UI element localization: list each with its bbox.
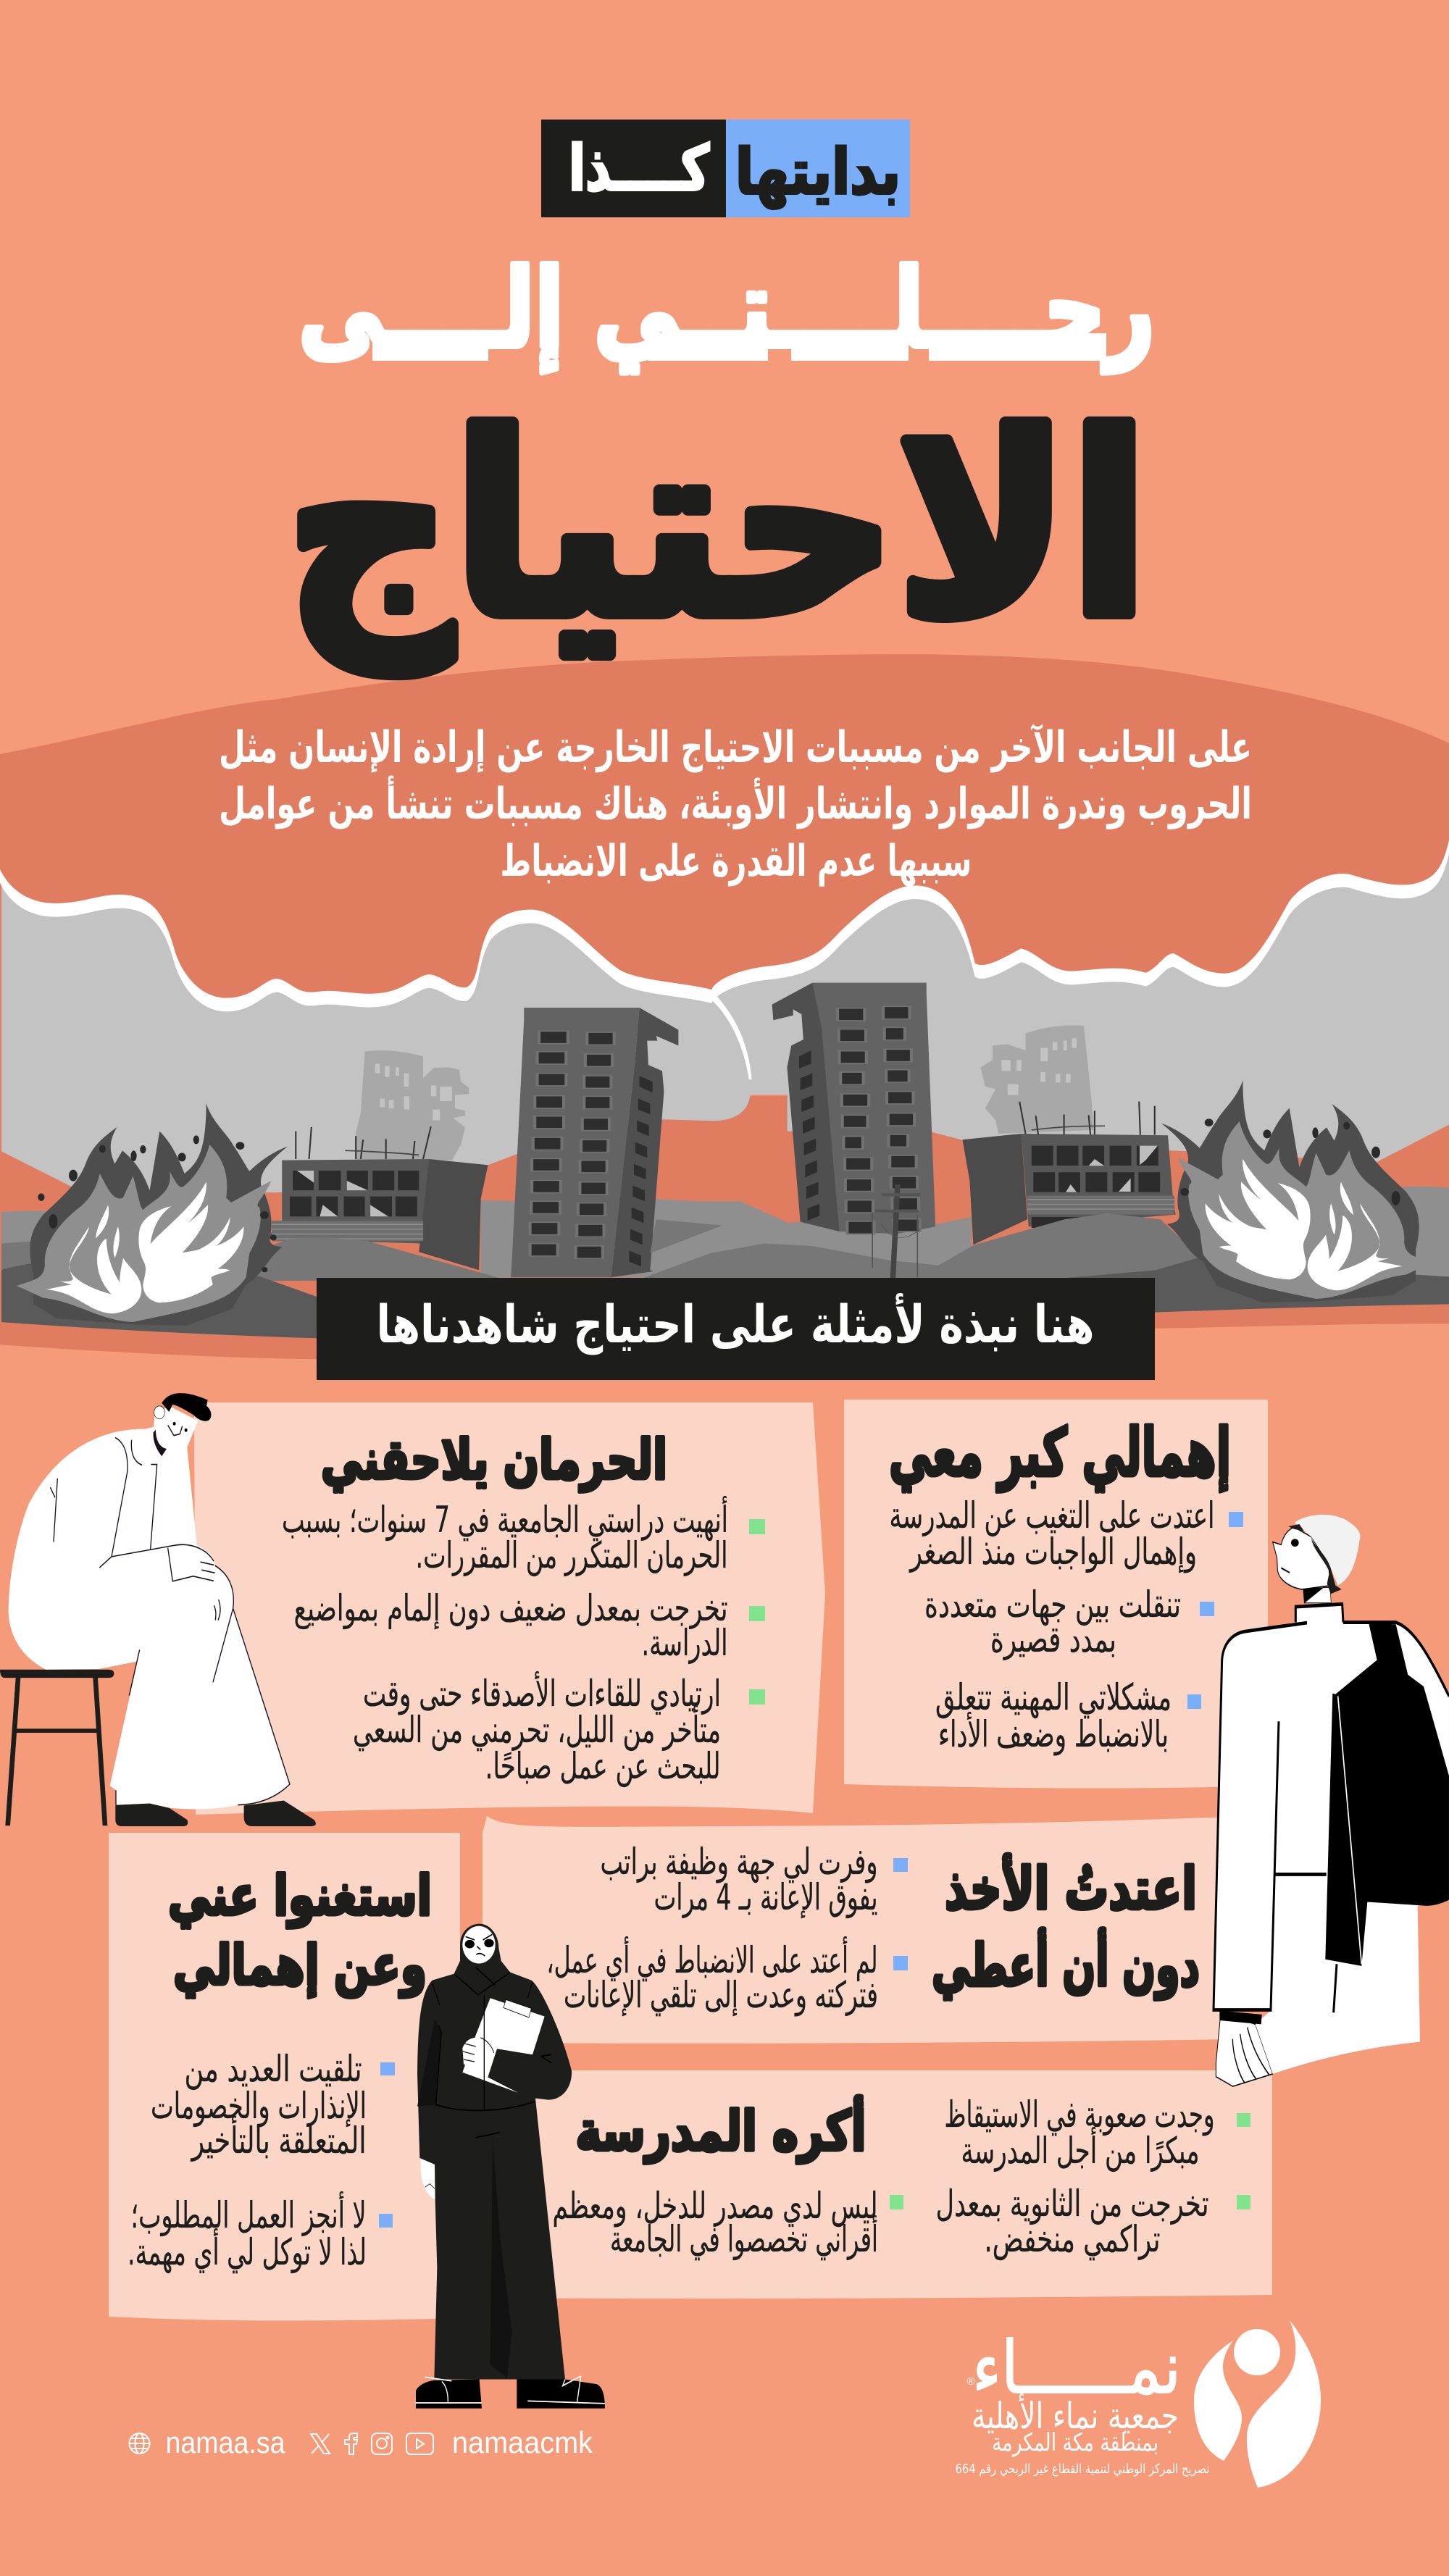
panel: الحرمان يلاحقني: تخرجت بمعدل ضعيف دون إلمام بمواضيع — [294, 1587, 727, 1630]
header tag: بدايتها كذا: بدايتها — [735, 136, 901, 209]
panel: أكره المدرسة: تخرجت من الثانوية بمعدل — [936, 2183, 1208, 2225]
building: low left block — [266, 1126, 488, 1270]
panel: استغنوا عني: لذا لا توكل لي أي مهمة. — [128, 2228, 367, 2274]
panel: استغنوا عني: لا أنجز العمل المطلوب؛ — [130, 2191, 367, 2236]
footer: website and social handles: namaacmk — [452, 2425, 593, 2459]
panel: إهمالي كبر معي: مشكلاتي المهنية تتعلق — [935, 1676, 1172, 1719]
figure: woman in abaya holding clipboard — [415, 1924, 605, 2409]
panel: الحرمان يلاحقني: الدراسة. — [642, 1622, 727, 1664]
panel: اعتدت الأخذ: دون أن أعطي — [932, 1928, 1200, 2000]
panel: استغنوا عني: المتعلقة بالتأخير — [190, 2115, 367, 2162]
panel: إهمالي كبر معي: إهمالي كبر معي — [889, 1414, 1231, 1492]
scene: war-torn city backdrop — [0, 837, 1449, 1364]
logo: Namaa: تصريح المركز الوطني لتنمية القطاع غير الربحي رقم 664 — [955, 2462, 1210, 2477]
panel: إهمالي كبر معي: بمدد قصيرة — [990, 1618, 1116, 1660]
panel: أكره المدرسة — [493, 2070, 1272, 2299]
panel: الحرمان يلاحقني: متأخر من الليل، تحرمني من السعي — [353, 1705, 721, 1751]
intro paragraph: سببها عدم القدرة على الانضباط — [500, 836, 972, 887]
panel: استغنوا عني: الإنذارات والخصومات — [151, 2085, 367, 2128]
panel: الحرمان يلاحقني: الحرمان المتكرر من المقررات. — [416, 1534, 727, 1576]
logo: Namaa: بمنطقة مكة المكرمة — [992, 2428, 1158, 2457]
panel: أكره المدرسة: تراكمي منخفض. — [984, 2218, 1161, 2260]
header tag: بدايتها كذا — [541, 120, 910, 217]
building: tall right tower — [772, 983, 935, 1234]
icon: globe — [129, 2433, 150, 2454]
logo: Namaa — [955, 2320, 1321, 2488]
dripping dome with white edge — [0, 654, 1449, 1079]
building: tall left tower — [511, 1008, 678, 1277]
building: low right block — [962, 1102, 1176, 1245]
panel: اعتدت الأخذ: يفوق الإعانة بـ 4 مرات — [653, 1876, 878, 1918]
panel: استغنوا عني — [109, 1833, 460, 2321]
logo: Namaa: نمــــــاء — [972, 2325, 1181, 2410]
panel: إهمالي كبر معي: بالانضباط وضعف الأداء — [938, 1712, 1169, 1756]
panel: الحرمان يلاحقني: ارتيادي للقاءات الأصدقاء حتى وقت — [363, 1671, 721, 1715]
panel: الحرمان يلاحقني: للبحث عن عمل صباحًا. — [485, 1745, 720, 1787]
panel: إهمالي كبر معي: اعتدت على التغيب عن المدرسة — [890, 1494, 1214, 1536]
panel: اعتدت الأخذ: اعتدتُ الأخذ — [945, 1854, 1197, 1923]
panel: استغنوا عني: استغنوا عني — [168, 1863, 432, 1928]
banner — [317, 1278, 1155, 1380]
panel: إهمالي كبر معي: وإهمال الواجبات منذ الصغر — [909, 1531, 1197, 1573]
figure: standing person with backpack — [1213, 1515, 1449, 2086]
panel: اعتدت الأخذ: لم أعتد على الانضباط في أي عمل، — [546, 1936, 878, 1981]
panel: اعتدت الأخذ — [483, 1816, 1232, 2044]
icon: Namaa emblem — [1194, 2320, 1321, 2488]
panel: أكره المدرسة: أقراني تخصصوا في الجامعة — [610, 2215, 878, 2260]
logo: Namaa: جمعية نماء الأهلية — [972, 2393, 1179, 2437]
icon: right flame — [1161, 1080, 1432, 1302]
panel: استغنوا عني: وعن إهمالي — [173, 1933, 427, 1998]
panel: استغنوا عني: تلقيت العديد من — [184, 2048, 362, 2090]
icon: social media row — [311, 2433, 433, 2454]
panel: إهمالي كبر معي — [844, 1400, 1268, 1789]
header tag: بدايتها كذا: كــــذا — [569, 133, 710, 205]
title line 2: الاحتياج — [285, 382, 1149, 675]
footer: website and social handles: namaa.sa — [165, 2425, 285, 2459]
footer: website and social handles — [129, 2425, 593, 2459]
title line 1: رحــــلــــتــي إلــــى — [298, 246, 1155, 373]
panel: أكره المدرسة: ليس لدي مصدر للدخل، ومعظم — [552, 2185, 878, 2228]
panel: الحرمان يلاحقني: الحرمان يلاحقني — [321, 1427, 667, 1492]
panel: اعتدت الأخذ: وفرت لي جهة وظيفة براتب — [600, 1841, 878, 1883]
panel: أكره المدرسة: أكره المدرسة — [575, 2095, 867, 2164]
intro paragraph — [219, 722, 1252, 887]
terrain: hills and utility pole — [0, 1184, 1250, 1282]
icon: left flame — [17, 1103, 288, 1326]
banner: هنا نبذة لأمثلة على احتياج شاهدناها — [377, 1292, 1094, 1355]
panel: الحرمان يلاحقني — [194, 1402, 825, 1815]
panel: إهمالي كبر معي: تنقلت بين جهات متعددة — [924, 1584, 1181, 1626]
panel: أكره المدرسة: مبكرًا من أجل المدرسة — [961, 2127, 1200, 2172]
figure: seated man on stool — [0, 1393, 316, 1826]
logo: Namaa: ® — [966, 2375, 975, 2388]
panel: أكره المدرسة: وجدت صعوبة في الاستيقاظ — [945, 2094, 1214, 2136]
panel: الحرمان يلاحقني: أنهيت دراستي الجامعية في 7 سنوات؛ بسبب — [282, 1496, 728, 1542]
panel: اعتدت الأخذ: فتركته وعدت إلى تلقي الإعانات — [564, 1974, 878, 2017]
